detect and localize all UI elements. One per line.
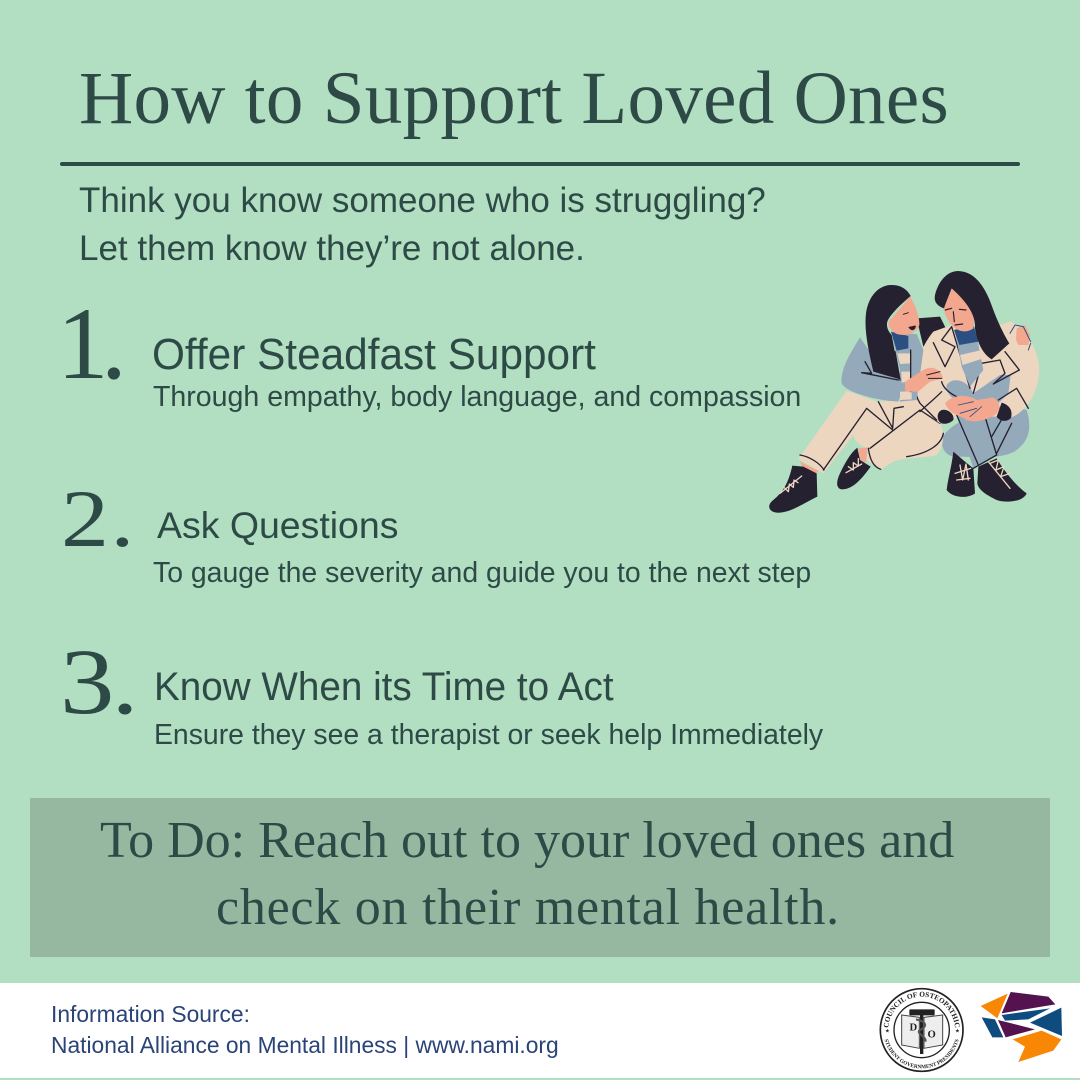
logo: council seal: ★ bbox=[885, 1029, 890, 1035]
step 2 description: To gauge the severity and guide you to the next step bbox=[153, 557, 811, 589]
call to action line 2: check on their mental health. bbox=[216, 879, 840, 936]
title: How to Support Loved Ones bbox=[79, 57, 949, 140]
illustration: two friends sitting, one comforting the other bbox=[769, 271, 1040, 513]
title rule bbox=[60, 162, 1020, 166]
bottom edge bbox=[0, 1078, 1080, 1080]
intro text: Think you know someone who is struggling? bbox=[79, 181, 766, 220]
right friend scarf bbox=[955, 327, 983, 387]
step 2 bbox=[61, 473, 811, 589]
source text: Information Source: bbox=[51, 1001, 250, 1027]
step 2 number: 2. bbox=[61, 473, 136, 564]
dark hair behind bbox=[917, 317, 947, 347]
step 3 number: 3. bbox=[60, 631, 136, 734]
step 3 heading: Know When its Time to Act bbox=[154, 665, 614, 709]
step 3 description: Ensure they see a therapist or seek help Immediately bbox=[154, 719, 823, 751]
right friend coat bbox=[913, 322, 1039, 423]
left friend hair bbox=[866, 285, 911, 379]
intro text: Let them know they’re not alone. bbox=[79, 229, 585, 268]
footer bbox=[0, 983, 1080, 1078]
left friend trousers bbox=[798, 391, 943, 473]
call to action panel bbox=[30, 798, 1050, 957]
right friend knees bbox=[946, 375, 1011, 403]
clasped hands bbox=[945, 396, 999, 421]
blue body back right bbox=[942, 408, 1029, 457]
right friend hair bbox=[935, 271, 1009, 359]
logo: council seal: O bbox=[928, 1029, 936, 1040]
step 1 number: 1. bbox=[57, 287, 119, 401]
step 1 bbox=[57, 287, 801, 413]
source text bbox=[51, 1001, 559, 1058]
left friend ankle bbox=[800, 462, 818, 475]
right friend face bbox=[944, 288, 975, 331]
right friend lower legs bbox=[957, 407, 1012, 468]
left friend shoe bbox=[769, 466, 817, 513]
source text: National Alliance on Mental Illness | www.nami.org bbox=[51, 1032, 559, 1058]
left friend sleeve line bbox=[862, 362, 898, 380]
call to action line 1: To Do: Reach out to your loved ones and bbox=[100, 812, 954, 869]
middle shoe bbox=[858, 447, 867, 463]
logo: council seal: ★ bbox=[955, 1029, 960, 1035]
cuffs bbox=[938, 403, 1012, 424]
right friend shoes bbox=[947, 452, 975, 497]
logo: colourful polygons bbox=[980, 992, 1062, 1062]
step 2 heading: Ask Questions bbox=[157, 505, 398, 546]
step 1 description: Through empathy, body language, and compassion bbox=[153, 381, 801, 413]
right friend coat lines bbox=[915, 327, 1028, 420]
left friend face bbox=[889, 297, 919, 335]
hand on shoulder bbox=[1016, 325, 1030, 345]
step 3 bbox=[60, 631, 823, 751]
intro text bbox=[79, 181, 766, 268]
logo: council seal: D bbox=[909, 1023, 917, 1034]
step 1 heading: Offer Steadfast Support bbox=[152, 330, 596, 379]
left friend scarf bbox=[892, 333, 923, 402]
logo: council seal bbox=[880, 988, 964, 1072]
left friend sleeve bbox=[841, 337, 905, 402]
hand on arm bbox=[905, 368, 943, 392]
logo: council seal: STUDENT GOVERNMENT PRESIDENTS bbox=[884, 1039, 958, 1068]
logo: council seal: COUNCIL OF OSTEOPATHIC bbox=[884, 992, 960, 1028]
